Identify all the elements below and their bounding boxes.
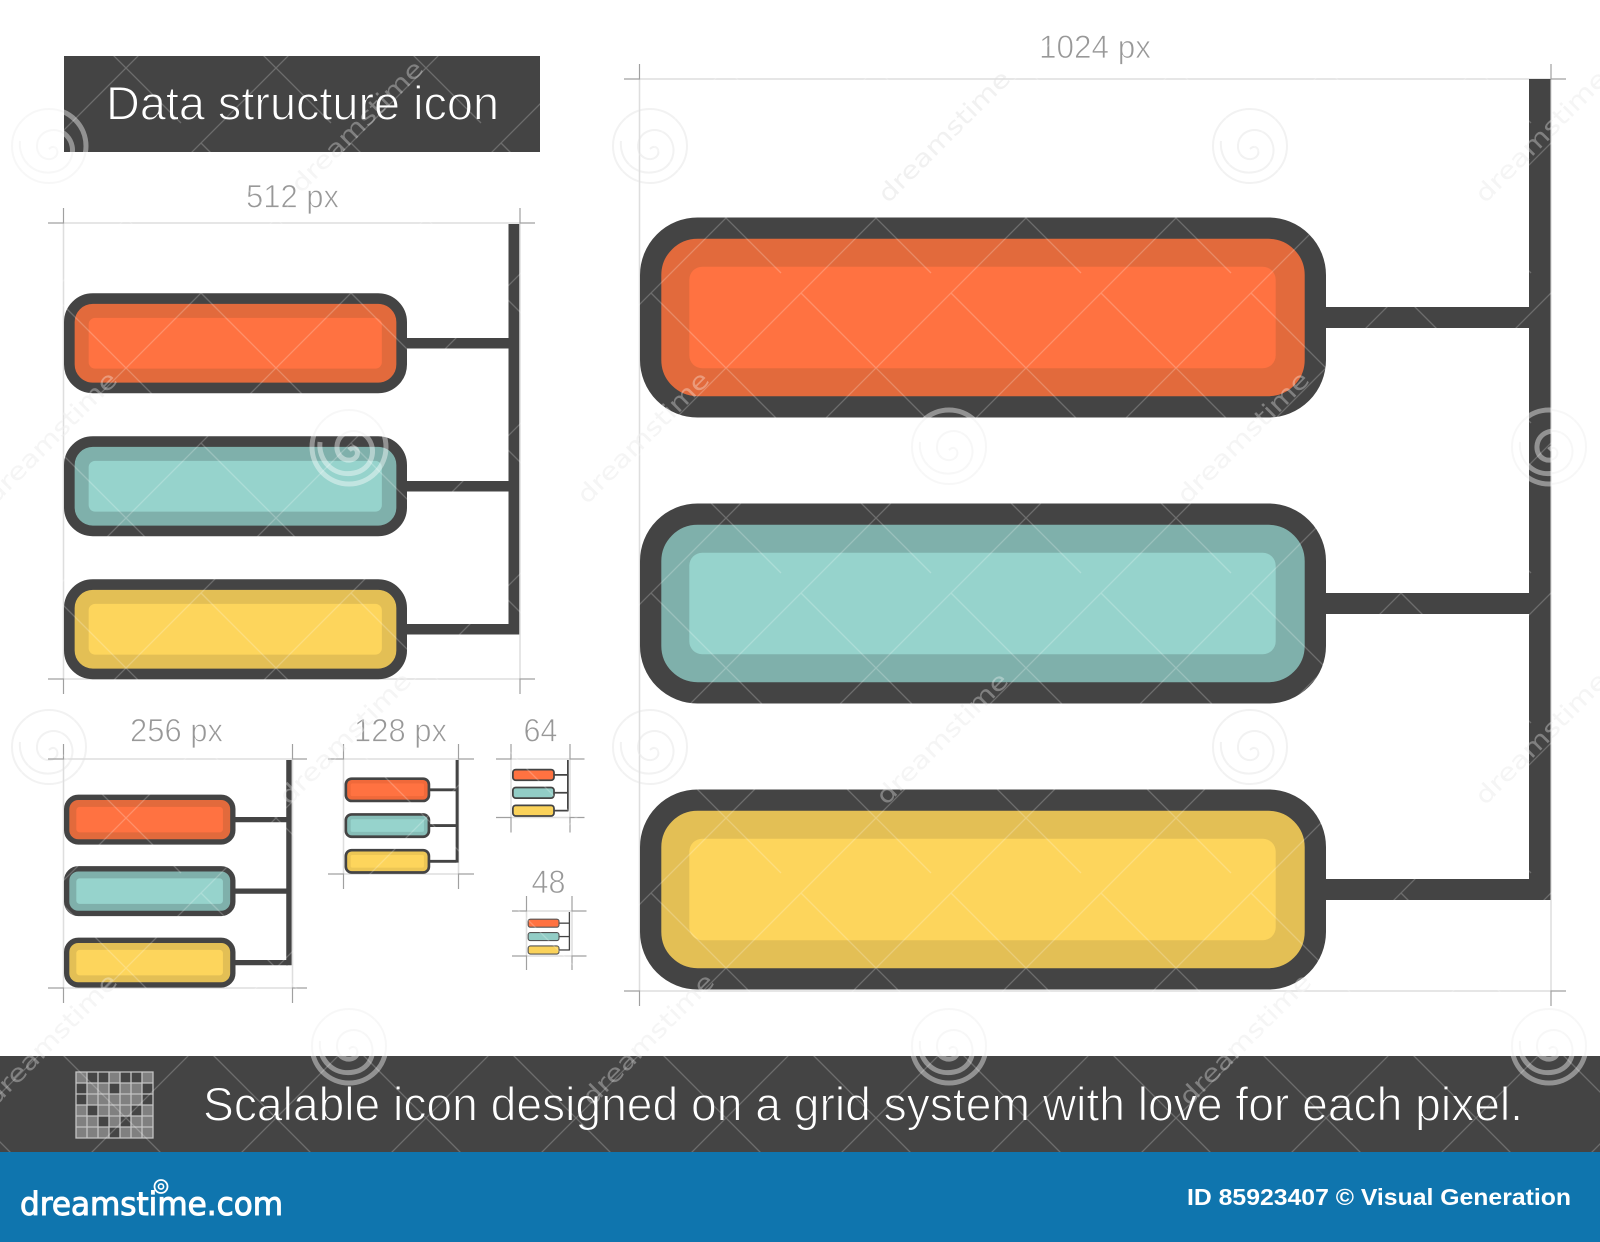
yellow row [528, 946, 569, 954]
icon: pixel grid [76, 1072, 153, 1138]
faint watermark on white: dreamstime [285, 55, 429, 198]
guide frame 64 [496, 744, 584, 832]
title text: Data structure icon [106, 76, 499, 130]
orange row [67, 797, 288, 842]
watermark overlay on colored areas: dreamstime [576, 968, 720, 1111]
size label: 1024 px: 1024 px [1039, 29, 1151, 65]
yellow row [651, 800, 1535, 979]
teal row [69, 442, 511, 531]
faint watermark on white: dreamstime [1173, 968, 1317, 1111]
orange row [346, 779, 456, 801]
faint watermark on white: dreamstime [571, 366, 715, 509]
watermark overlay on colored areas: dreamstime [1171, 366, 1315, 509]
faint watermark on white: dreamstime [872, 65, 1016, 208]
watermark overlay on colored areas: dreamstime [1469, 65, 1600, 208]
guide frame 1024 [624, 64, 1566, 1006]
yellow row [67, 940, 288, 985]
guide frame 48 [512, 896, 586, 970]
orange row [69, 299, 511, 388]
icon 1024 px [651, 79, 1550, 979]
faint watermark on white: dreamstime [1171, 366, 1315, 509]
icon 48 px [528, 912, 570, 954]
teal row [651, 514, 1535, 693]
orange row [528, 919, 569, 927]
yellow row [513, 805, 568, 816]
icon: logo spiral [154, 1180, 168, 1193]
yellow row [346, 850, 456, 872]
yellow row [69, 585, 511, 674]
size label: 64: 64 [524, 712, 558, 748]
icon 512 px [69, 224, 519, 674]
faint watermark on white: dreamstime [576, 968, 720, 1111]
blue footer band [0, 1152, 1600, 1242]
watermark overlay on colored areas: dreamstime [273, 667, 417, 810]
faint watermark on white: dreamstime [870, 667, 1014, 810]
image id credit: ID 85923407 © Visual Generation [1187, 1184, 1571, 1210]
size label: 128 px: 128 px [354, 712, 447, 748]
watermark overlay on colored areas: dreamstime [285, 55, 429, 198]
watermark overlay on colored areas: dreamstime [571, 366, 715, 509]
faint watermark on white: dreamstime [1469, 667, 1600, 810]
icon 64 px [513, 760, 569, 816]
icon 256 px [67, 760, 292, 985]
title banner [64, 56, 540, 152]
watermark overlay on colored areas: dreamstime [870, 667, 1014, 810]
guide frame 512 [48, 208, 535, 694]
teal row [513, 787, 568, 798]
watermark overlay on colored areas: dreamstime [1173, 968, 1317, 1111]
orange row [513, 770, 568, 780]
dreamstime logo: dreamstime.com [20, 1185, 283, 1223]
faint watermark on white: dreamstime [1469, 65, 1600, 208]
teal row [67, 869, 288, 913]
size label: 512 px: 512 px [246, 178, 339, 214]
guide frame 128 [328, 744, 474, 889]
faint watermark on white: dreamstime [273, 667, 417, 810]
size label: 256 px: 256 px [130, 712, 223, 748]
orange row [651, 228, 1535, 407]
guide frame 256 [48, 744, 307, 1003]
caption text: Scalable icon designed on a grid system with love for each pixel. [203, 1078, 1523, 1130]
grey caption band [0, 1056, 1600, 1152]
watermark overlay on colored areas: dreamstime [1469, 667, 1600, 810]
teal row [346, 814, 456, 837]
icon 128 px [346, 760, 459, 872]
size label: 48: 48 [532, 864, 566, 900]
teal row [528, 933, 569, 941]
